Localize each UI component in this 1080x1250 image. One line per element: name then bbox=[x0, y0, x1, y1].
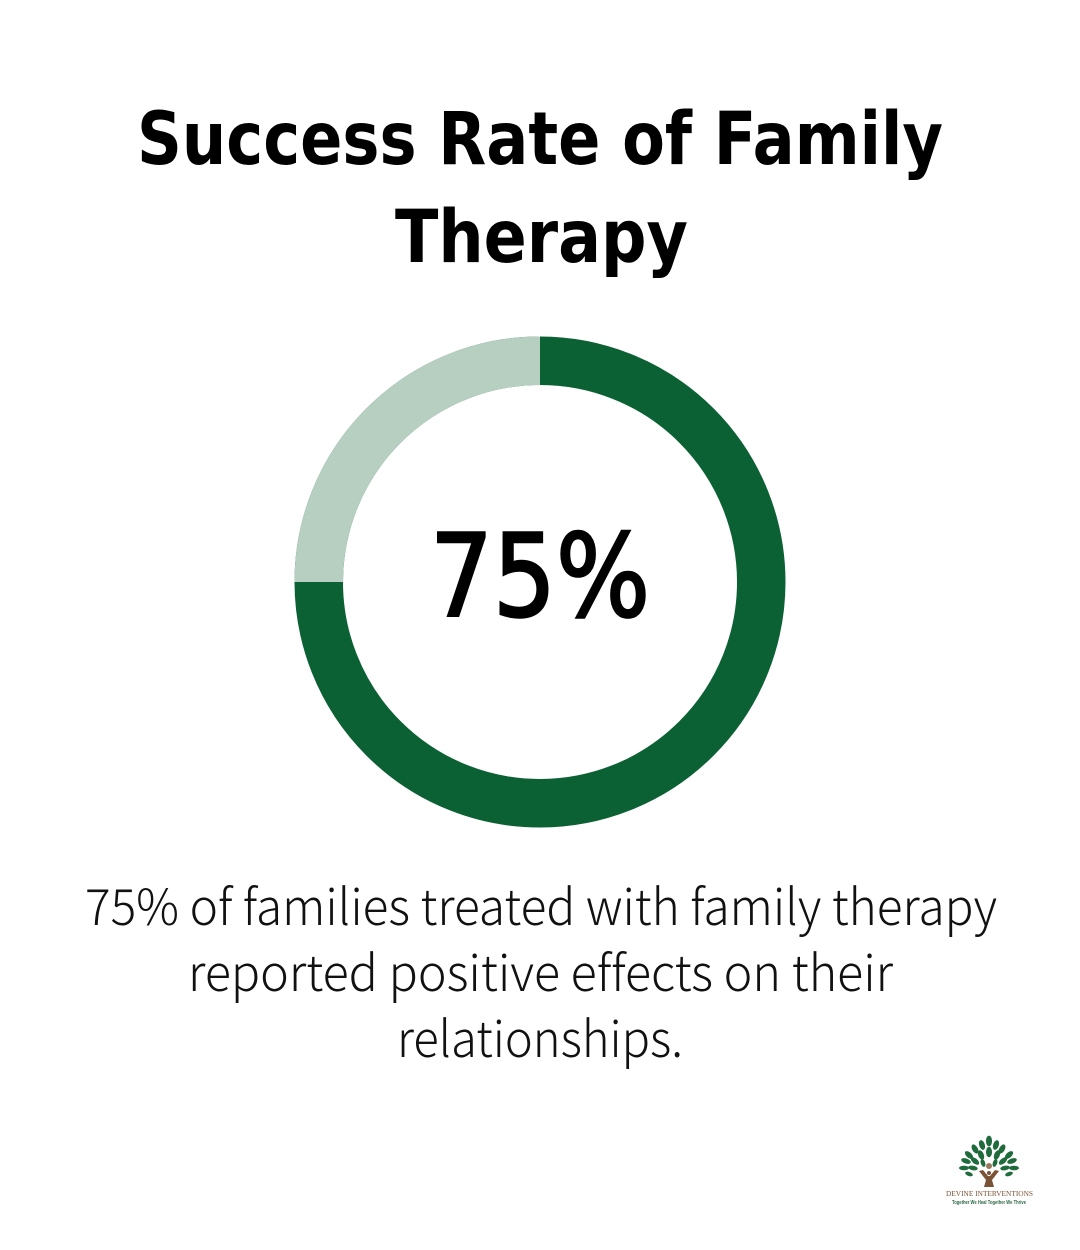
title bbox=[137, 97, 943, 280]
icon: tree trunk figure bbox=[979, 1163, 999, 1187]
description text: reported positive effects on their bbox=[188, 934, 894, 1006]
logo name: DEVINE INTERVENTIONS bbox=[946, 1190, 1033, 1198]
title: Therapy bbox=[395, 195, 688, 280]
icon: tree leaves bbox=[959, 1136, 1019, 1177]
donut chart: 75 percent bbox=[319, 361, 761, 803]
description text: 75% of families treated with family therapy bbox=[85, 868, 997, 940]
logo: Devine Interventions bbox=[946, 1136, 1033, 1206]
title: Success Rate of Family bbox=[137, 97, 943, 182]
donut value: 75% bbox=[430, 510, 650, 643]
description text bbox=[85, 868, 997, 1072]
description text: relationships. bbox=[397, 1000, 683, 1072]
logo tagline: Together We Heal Together We Thrive bbox=[952, 1200, 1026, 1206]
